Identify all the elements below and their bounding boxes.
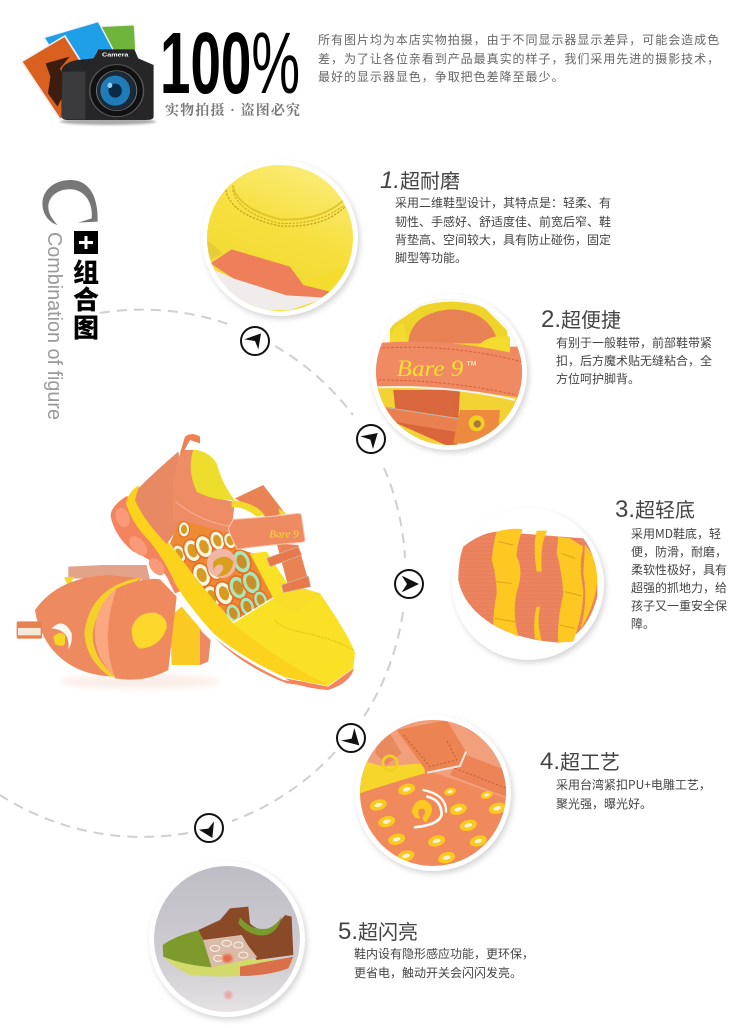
- feature 4: craftsmanship: [355, 715, 711, 874]
- heading 3: 3.超轻底: [615, 496, 695, 523]
- icon: arrow marker 3: [395, 570, 423, 598]
- heading 4: 4.超工艺: [540, 748, 620, 775]
- header: photo note banner: [22, 15, 720, 125]
- velcro strap: Bare 9: [269, 529, 299, 540]
- subheading: authenticity note: 实物拍摄 · 盗图必究: [165, 100, 300, 120]
- text block 2: 扣，后方魔术贴无缝粘合，全: [556, 352, 712, 369]
- text block: colour disclaimer: 最好的显示器显色，争取把色差降至最少。: [318, 68, 564, 85]
- shoe upright: [111, 434, 355, 690]
- label: Chinese caption: [73, 253, 99, 345]
- text block 4: 采用台湾紧扣PU+电雕工艺，: [556, 776, 711, 793]
- photo circle 1: [202, 160, 360, 319]
- text block 1: 韧性、手感好、舒适度佳、前宽后窄、鞋: [395, 213, 611, 230]
- shoe lying on side: [17, 565, 211, 680]
- photo circle 2: Bare 9: [397, 356, 464, 382]
- text block: colour disclaimer: [318, 31, 720, 85]
- text block 1: 背垫高、空间较大，具有防止碰伤，固定: [395, 231, 611, 248]
- text block 2: 有别于一般鞋带，前部鞋带紧: [556, 334, 712, 351]
- text block 3: 超强的抓地力，给: [631, 579, 727, 596]
- photo circle 2: TM: [467, 360, 477, 367]
- icon: arrow marker 4: [337, 724, 365, 752]
- photo circle 4: [355, 715, 515, 874]
- feature 2: convenient: [370, 294, 712, 453]
- velcro strap: [228, 513, 305, 549]
- text block 3: 便，防滑，耐磨，: [631, 543, 727, 560]
- label: English caption: Combination of figure: [43, 232, 65, 420]
- text block 2: [556, 334, 712, 387]
- text block 3: 孩子又一重安全保: [631, 597, 727, 614]
- icon: C arc: [42, 180, 98, 225]
- text block 3: [631, 525, 727, 632]
- icon: plus box: [74, 231, 98, 254]
- text block 1: 采用二维鞋型设计，其特点是：轻柔、有: [395, 194, 611, 211]
- icon: arrow marker 5: [195, 814, 223, 842]
- photo circle 3: [452, 508, 606, 663]
- label: Chinese caption: 图: [73, 308, 99, 345]
- feature 1: wear resistant: [202, 160, 611, 319]
- text block 5: 更省电，触动开关会闪闪发亮。: [354, 964, 522, 981]
- text block 3: 采用MD鞋底，轻: [631, 525, 721, 542]
- heading: 100%: 100%: [160, 15, 300, 112]
- icon: camera with photos: [22, 22, 156, 125]
- label: Chinese caption: 合: [73, 280, 99, 317]
- dashed arc connector: [0, 310, 405, 837]
- icon: camera with photos: Camera: [102, 53, 129, 58]
- text block: colour disclaimer: 差，为了让各位亲看到产品最真实的样子，我们采用先进的摄影技术，: [318, 50, 720, 67]
- icon: arrow marker 1: [241, 327, 269, 355]
- text block 3: 障。: [631, 615, 655, 632]
- text block: colour disclaimer: 所有图片均为本店实物拍摄，由于不同显示器显示差异，可能会造成色: [318, 31, 720, 48]
- text block 4: 聚光强，曝光好。: [556, 795, 652, 812]
- feature 5: flashing: [149, 861, 534, 1020]
- heading 5: 5.超闪亮: [338, 918, 418, 945]
- photo circle 2: [370, 294, 530, 453]
- text block 5: 鞋内设有隐形感应功能，更环保，: [354, 945, 534, 962]
- text block 5: [354, 945, 534, 981]
- text block 1: 脚型等功能。: [395, 249, 467, 266]
- text block 1: [395, 194, 611, 266]
- feature 3: light sole: [452, 496, 727, 663]
- main photo: shoes: [17, 434, 355, 690]
- heading 2: 2.超便捷: [541, 306, 621, 333]
- text block 4: [556, 776, 711, 812]
- pattern panel: [169, 520, 274, 625]
- icon: arrow marker 2: [357, 425, 385, 453]
- side heading: combination of figure: [42, 180, 99, 420]
- text block 3: 柔软性极好，具有: [631, 561, 727, 578]
- tongue under laces: [277, 543, 310, 587]
- heading 1: 1.超耐磨: [380, 167, 460, 194]
- text block 2: 方位呵护脚背。: [556, 370, 640, 387]
- label: Chinese caption: 组: [73, 253, 99, 290]
- photo circle 5: [149, 861, 307, 1020]
